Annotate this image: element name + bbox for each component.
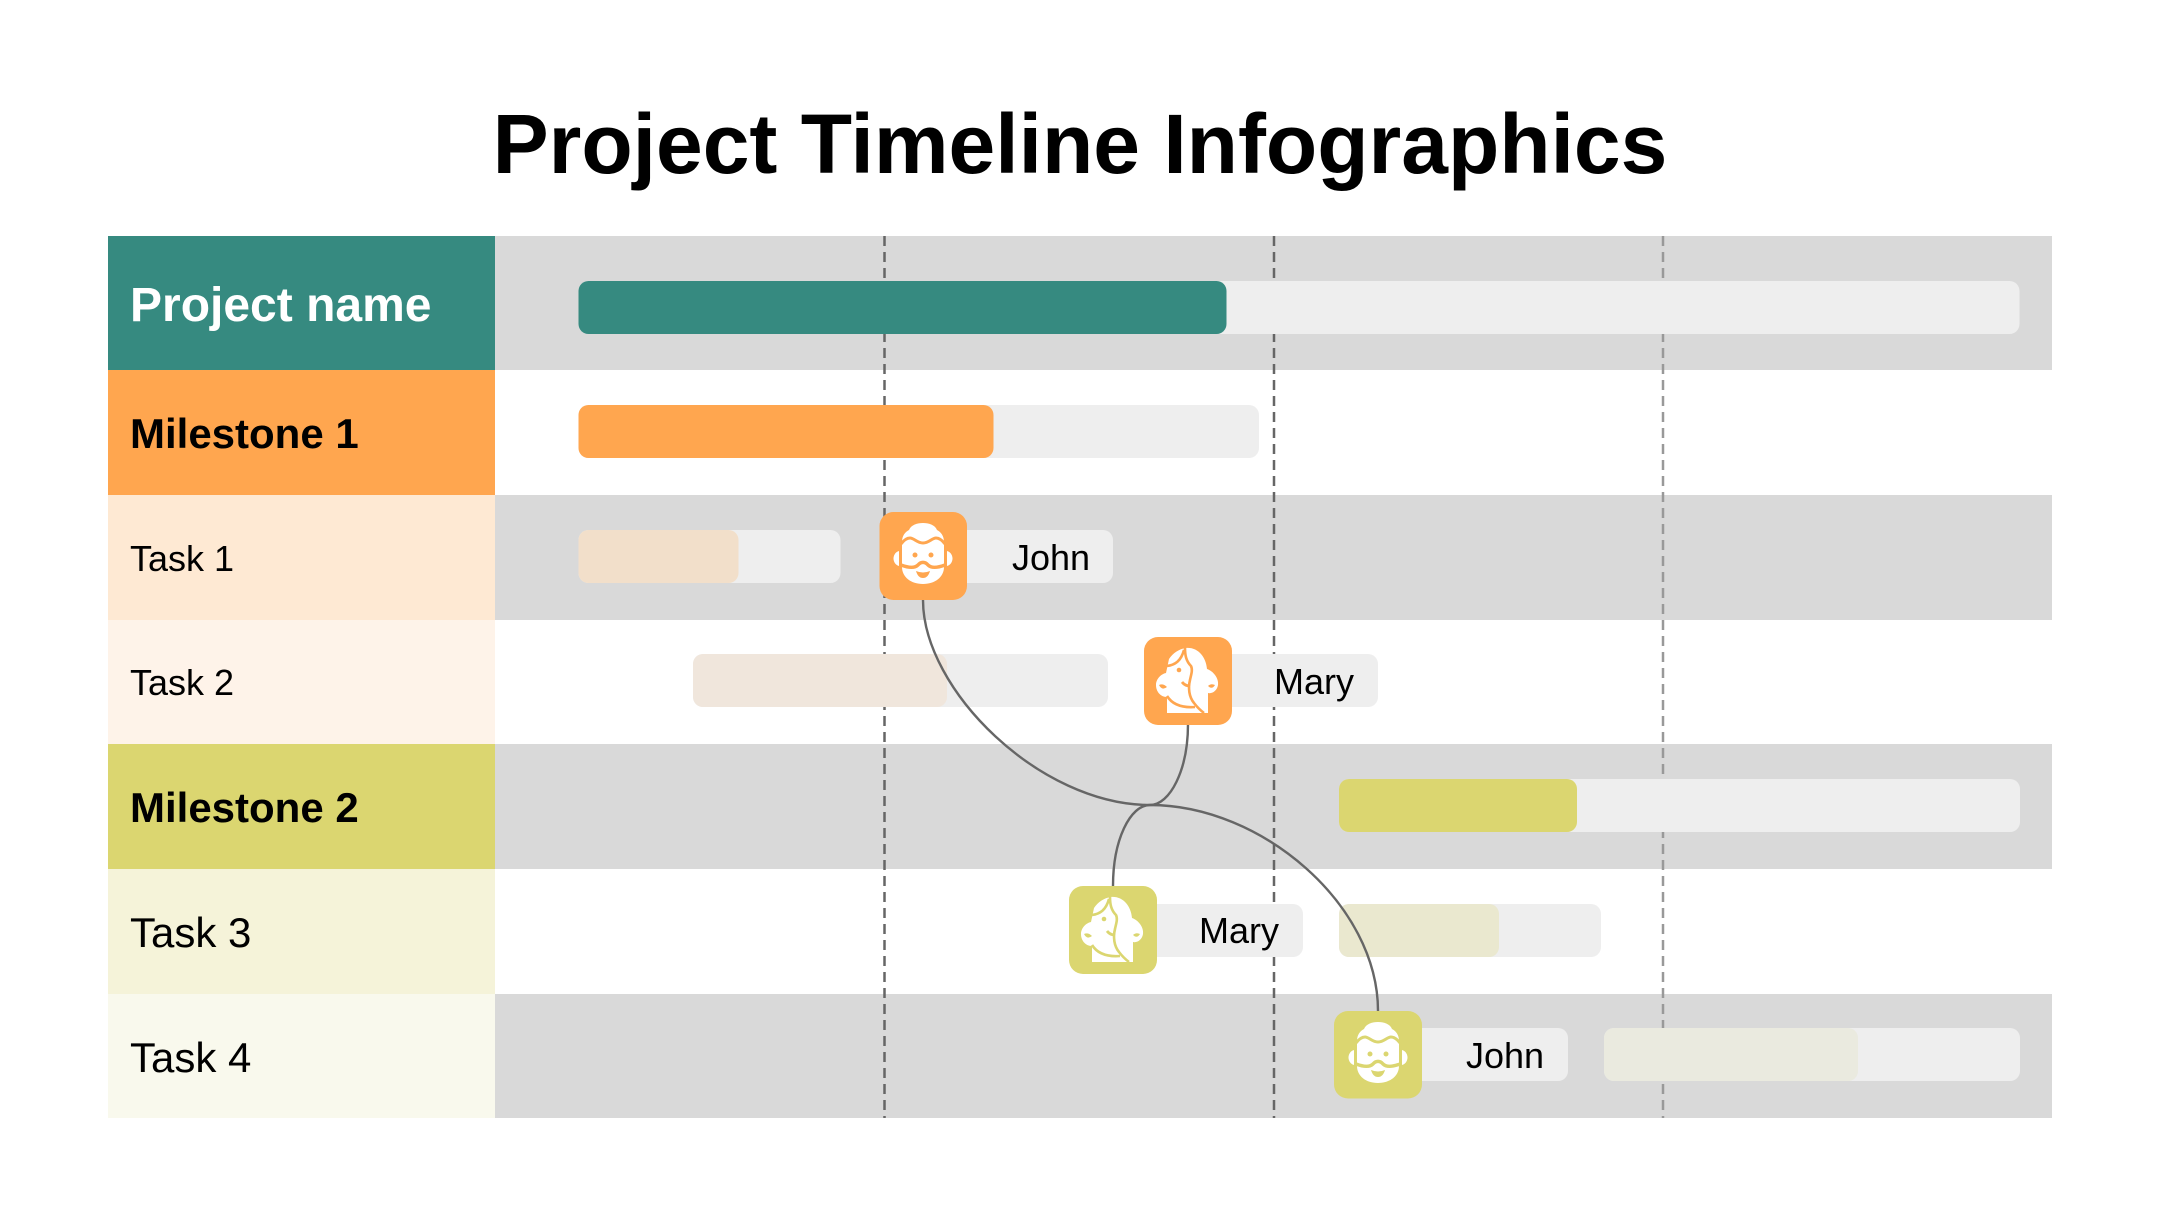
title: Project Timeline Infographics — [493, 97, 1667, 191]
panel: milestone 2 row: Milestone 2 — [130, 784, 359, 831]
panel: task 1 row: Task 1 — [130, 538, 234, 579]
row backgrounds — [495, 236, 2052, 1118]
timeline dashed gridlines — [884, 236, 1663, 1118]
panel: task 1 row: John — [1012, 537, 1090, 578]
panel: milestone 2 row — [108, 744, 2020, 869]
panel: task 1 row — [108, 495, 1113, 620]
panel: task 4 row: Task 4 — [130, 1034, 251, 1081]
icon: Mary avatar orange — [1144, 637, 1232, 725]
icon: John avatar yellow — [1334, 1011, 1422, 1098]
panel: project name row: Project name — [130, 279, 431, 332]
panel: task 2 row — [108, 620, 1378, 744]
connector: John dependency curve — [923, 600, 1378, 1011]
panel: milestone 1 row — [108, 370, 1259, 495]
panel: task 4 row: John — [1466, 1035, 1544, 1076]
panel: task 2 row: Mary — [1274, 661, 1354, 702]
connector: Mary dependency curve — [1113, 724, 1188, 886]
panel: task 4 row — [108, 994, 2020, 1118]
panel: task 2 row: Task 2 — [130, 662, 234, 703]
panel: task 3 row — [108, 869, 1601, 994]
panel: project name row — [108, 236, 2020, 370]
panel: task 3 row: Mary — [1199, 910, 1279, 951]
panel: milestone 1 row: Milestone 1 — [130, 410, 359, 457]
icon: Mary avatar yellow — [1069, 886, 1157, 974]
icon: John avatar orange — [880, 512, 967, 600]
panel: task 3 row: Task 3 — [130, 909, 251, 956]
